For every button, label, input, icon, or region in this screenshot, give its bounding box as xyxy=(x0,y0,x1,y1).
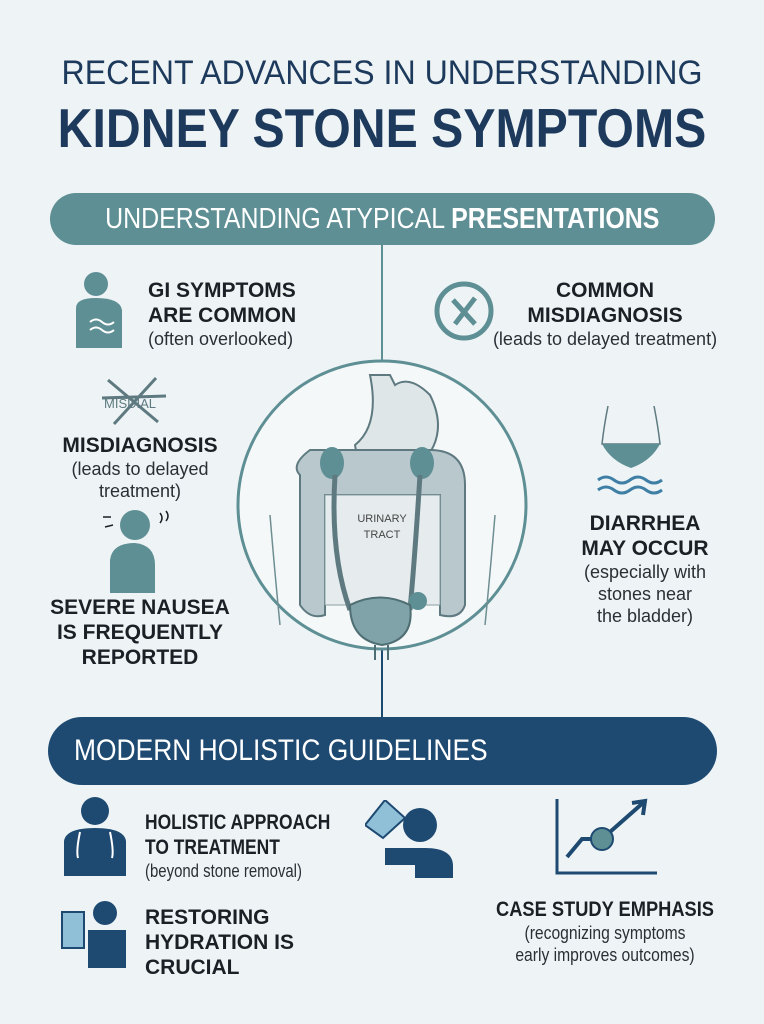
item: severe nausea: REPORTED xyxy=(82,646,198,669)
title xyxy=(58,54,706,159)
title: RECENT ADVANCES IN UNDERSTANDING xyxy=(62,54,702,92)
section header: atypical presentations xyxy=(50,193,715,245)
item: diarrhea xyxy=(581,512,709,626)
item: GI symptoms: ARE COMMON xyxy=(148,304,296,327)
section header: holistic guidelines: MODERN HOLISTIC GUIDELINES xyxy=(74,734,488,767)
item: restoring hydration: HYDRATION IS xyxy=(145,931,294,954)
item: misdiagnosis: treatment) xyxy=(99,481,181,501)
item: severe nausea: IS FREQUENTLY xyxy=(57,621,223,644)
item: case study: CASE STUDY EMPHASIS xyxy=(496,898,714,921)
item: restoring hydration: RESTORING xyxy=(145,906,269,929)
icon: drinking person xyxy=(365,800,453,878)
item: diarrhea: stones near xyxy=(598,584,692,604)
section header: atypical presentations: UNDERSTANDING ATYPICAL PRESENTATIONS xyxy=(105,203,660,235)
item: case study xyxy=(496,898,714,965)
item: restoring hydration xyxy=(145,906,294,979)
item: common misdiagnosis xyxy=(493,279,717,349)
item: common misdiagnosis: (leads to delayed treatment) xyxy=(493,329,717,349)
icon: hydration xyxy=(61,901,126,968)
item: severe nausea xyxy=(50,596,230,669)
item: GI symptoms: (often overlooked) xyxy=(148,329,293,349)
title: KIDNEY STONE SYMPTOMS xyxy=(58,97,706,159)
item: restoring hydration: CRUCIAL xyxy=(145,956,240,979)
item: holistic approach xyxy=(145,811,330,881)
item: holistic approach: HOLISTIC APPROACH xyxy=(145,811,330,834)
item: case study: early improves outcomes) xyxy=(515,945,695,965)
item: diarrhea: MAY OCCUR xyxy=(581,537,709,560)
item: GI symptoms xyxy=(148,279,296,349)
icon: doctor xyxy=(64,797,126,876)
item: severe nausea: SEVERE NAUSEA xyxy=(50,596,230,619)
section header: holistic guidelines xyxy=(48,717,717,785)
item: misdiagnosis xyxy=(62,434,218,501)
item: common misdiagnosis: MISDIAGNOSIS xyxy=(527,304,683,327)
icon: abdomen waves xyxy=(597,406,663,494)
icon: crossed label: MISDIAL xyxy=(104,396,156,411)
illustration: urinary tract in circle xyxy=(236,360,528,660)
item: GI symptoms: GI SYMPTOMS xyxy=(148,279,296,302)
item: common misdiagnosis: COMMON xyxy=(556,279,654,302)
icon: x circle xyxy=(434,282,494,340)
icon: nausea person xyxy=(103,510,169,593)
item: diarrhea: DIARRHEA xyxy=(590,512,700,535)
item: misdiagnosis: (leads to delayed xyxy=(71,459,209,479)
item: misdiagnosis: MISDIAGNOSIS xyxy=(62,434,218,457)
item: holistic approach: (beyond stone removal) xyxy=(145,861,302,881)
item: holistic approach: TO TREATMENT xyxy=(145,836,280,859)
illustration: urinary tract in circle: TRACT xyxy=(364,529,401,541)
label: urinary tract: URINARY xyxy=(357,513,407,525)
icon: chart xyxy=(556,798,657,874)
item: case study: (recognizing symptoms xyxy=(524,923,686,943)
item: diarrhea: (especially with xyxy=(584,562,706,582)
icon: stomach person xyxy=(76,272,122,348)
icon: crossed label xyxy=(102,377,166,425)
item: diarrhea: the bladder) xyxy=(597,606,693,626)
